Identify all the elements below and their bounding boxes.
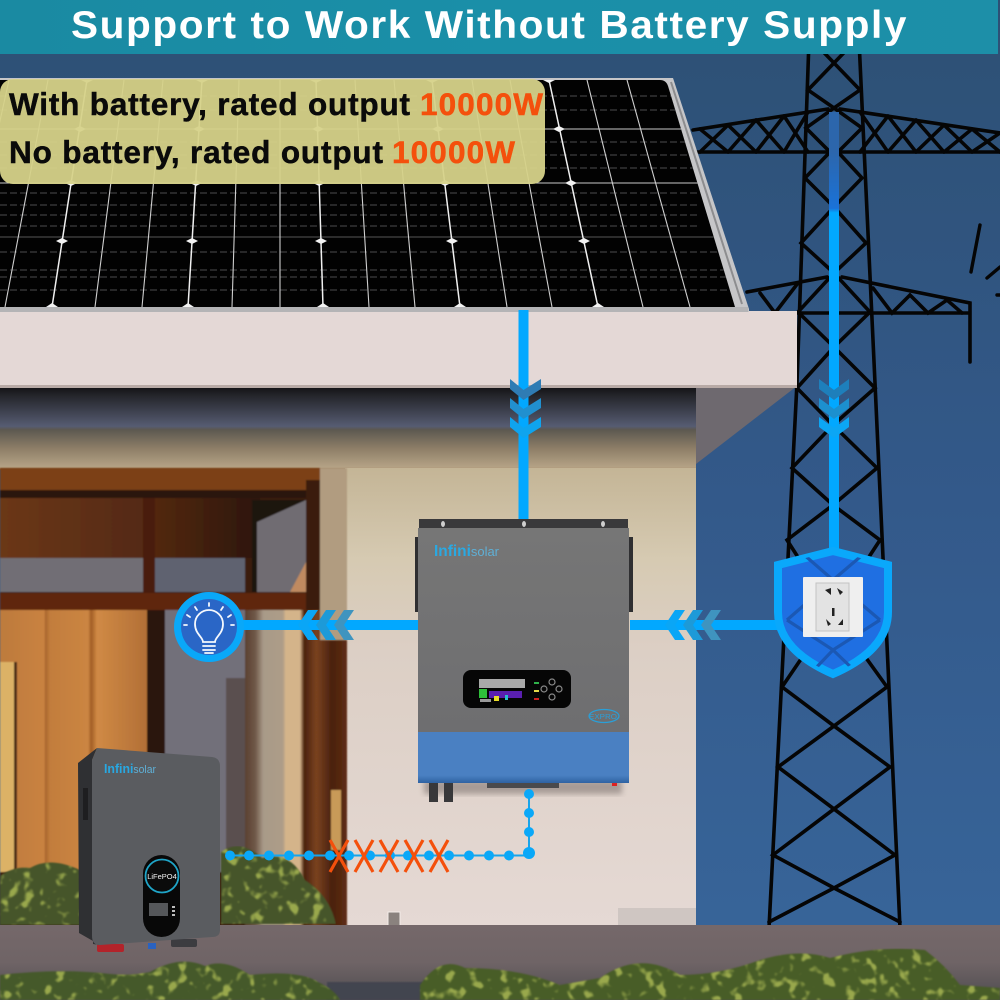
model badge: EXPRO [589, 714, 618, 721]
battery connection: dotted line [225, 789, 535, 860]
panel cells [0, 77, 750, 311]
arrow chevrons: grid input line [665, 610, 721, 640]
battery display capsule [143, 855, 180, 937]
roof soffit [0, 386, 696, 470]
battery ring [146, 860, 178, 892]
callout value: with battery: 10000W [420, 86, 543, 122]
panel frame [0, 78, 749, 312]
battery terminals [97, 939, 197, 952]
battery label: LiFePO4 [147, 872, 177, 881]
inverter blue base [418, 732, 629, 783]
arrow chevrons: grid line [819, 379, 849, 438]
roof underside shadow wedge [696, 386, 797, 464]
inverter shadow [424, 780, 622, 794]
porch interior [0, 468, 347, 928]
power line: inverter to light bulb [240, 620, 420, 630]
top bracket [419, 519, 628, 529]
inverter body [418, 528, 629, 733]
socket holes [825, 588, 843, 626]
bushes at the wall [0, 846, 336, 925]
icon: light bulb [174, 592, 244, 662]
wall base slab [618, 908, 696, 925]
protective shield with wall socket [778, 540, 888, 674]
power transmission tower [693, 36, 1000, 928]
power line: solar panel to inverter [518, 310, 528, 522]
tower lattice seen through shield [786, 557, 881, 667]
house facade [0, 386, 797, 928]
callout line: no battery: No battery, rated output [9, 134, 384, 170]
arrow chevrons: solar line [510, 379, 541, 438]
arrow chevrons: load line [298, 610, 354, 640]
pv connectors [429, 783, 453, 802]
house wall [345, 468, 696, 926]
control buttons [541, 679, 562, 700]
battery side [78, 748, 100, 945]
ground and foreground [0, 846, 1000, 1000]
inverter logo: Infinisolar [434, 543, 500, 560]
shield [778, 551, 888, 674]
socket inner plate [816, 583, 849, 631]
battery unit [78, 748, 220, 952]
ground shadow patch [327, 982, 423, 1000]
status leds [534, 682, 539, 700]
title banner [0, 0, 998, 54]
lightning marks near tower [971, 225, 1000, 295]
callout: rated output [0, 79, 545, 184]
power line: grid tower to shield [829, 112, 839, 552]
callout background [0, 79, 545, 184]
socket plate [803, 577, 863, 637]
solar panel [0, 77, 750, 312]
wall outlet box [388, 912, 400, 926]
battery indicators [172, 906, 175, 916]
battery handle recess [83, 788, 88, 820]
model badge [589, 710, 619, 722]
disconnected marks: orange crosses [330, 840, 448, 872]
battery screen [149, 903, 168, 916]
inverter [415, 519, 633, 802]
side tabs [415, 537, 633, 612]
title: Support to Work Without Battery Supply [71, 4, 908, 47]
power line: shield to inverter [630, 620, 780, 630]
battery logo: Infinisolar [104, 761, 156, 776]
display panel [463, 670, 571, 708]
callout value: no battery: 10000W [392, 134, 515, 170]
roof fascia [0, 311, 797, 388]
lcd readout [479, 679, 525, 702]
battery front [92, 748, 220, 945]
callout line: with battery: With battery, rated output [9, 86, 410, 122]
foreground bushes [0, 949, 1000, 1000]
mounting holes [441, 521, 605, 527]
bottom terminal cover [487, 783, 559, 788]
